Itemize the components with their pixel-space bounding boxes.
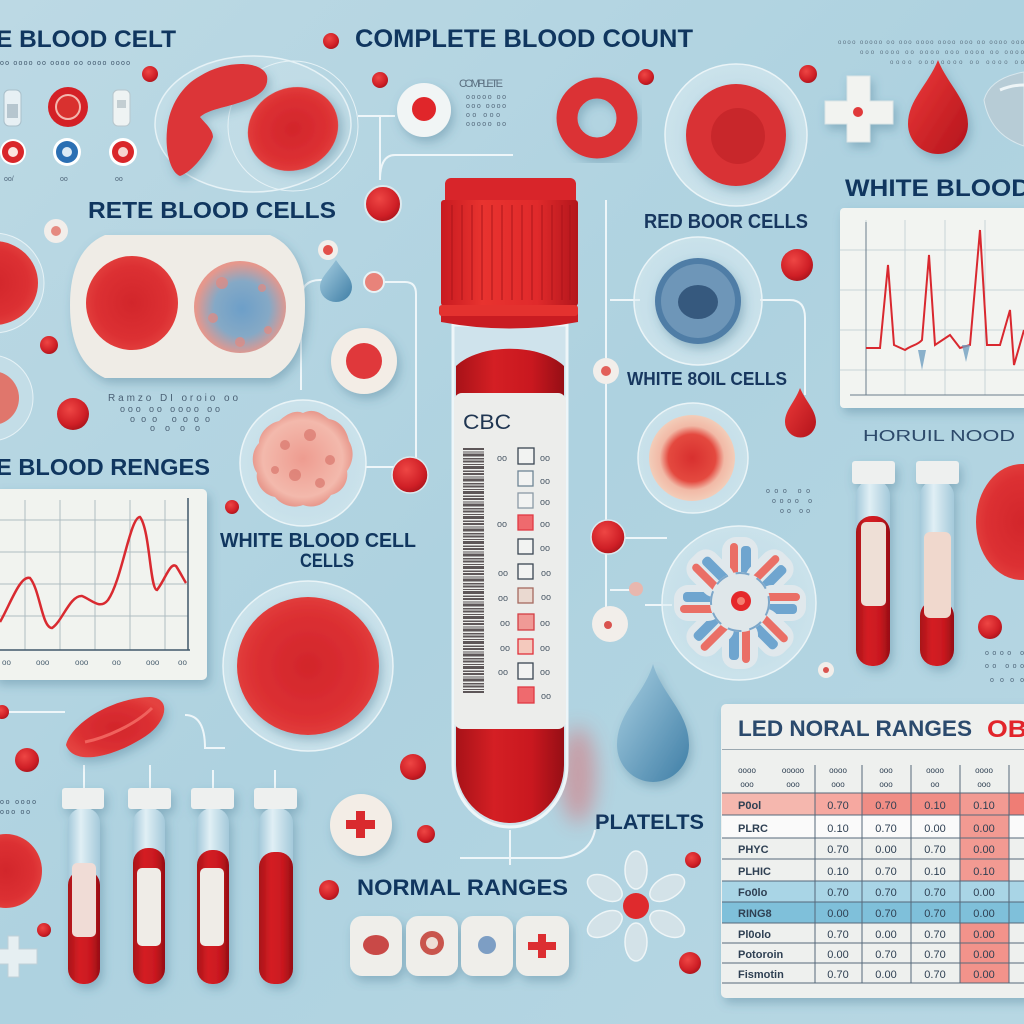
tube body (453, 325, 567, 827)
heading: platelts: PLATELTS (595, 811, 704, 834)
small text: top right note (838, 40, 1024, 66)
table text: ooo (740, 780, 754, 789)
chart: right ecg chart (840, 208, 1024, 408)
table title: LED NORAL RANGES (738, 716, 972, 741)
node: white button top (397, 83, 451, 137)
small text: complete note: ooooo oo (466, 94, 506, 101)
icon: red ring cell (567, 88, 627, 148)
label values: oo (540, 643, 550, 653)
table text: 0.70 (924, 929, 946, 941)
table text: ooo (879, 780, 893, 789)
icon: speckled cell (194, 261, 286, 353)
cell group: top left cells (155, 56, 358, 192)
small text: under cell card: Ramzo DI oroio oo (108, 393, 238, 404)
table text: 0.00 (973, 949, 995, 961)
chart: left line chart (0, 489, 207, 680)
label values: oo (540, 519, 550, 529)
table text: 0.00 (973, 908, 995, 920)
cell: right edge red cell (976, 464, 1024, 580)
table text: 0.00 (973, 887, 995, 899)
heading: cells: CELLS (300, 551, 354, 572)
heading: normal ranges: NORMAL RANGES (357, 875, 568, 900)
icon row: small icons top left (0, 87, 137, 183)
icon: biconcave cell (66, 697, 164, 757)
label values: oo (498, 667, 508, 677)
table text: ooooo (782, 766, 805, 775)
cell: platelet flower (662, 526, 816, 680)
icon row: small icons top left: oo (115, 176, 123, 183)
icon: hanging red drop (785, 388, 816, 437)
small text: right notes: oooo o (772, 498, 812, 505)
label values: oo (541, 592, 551, 602)
barcode (463, 448, 484, 693)
small text: right notes (766, 488, 1024, 684)
heading: white soil cells: WHITE 8OIL CELLS (627, 369, 787, 389)
label (454, 393, 566, 729)
heading: red boor cells: RED BOOR CELLS (644, 211, 808, 233)
icon row: normal range tiles (350, 916, 569, 976)
label values: oo (500, 643, 510, 653)
cell: left red bottom (0, 834, 42, 908)
label values: oo (540, 667, 550, 677)
label values: oo (540, 453, 550, 463)
table text: 0.00 (973, 823, 995, 835)
table text: PHYC (738, 844, 769, 856)
table text: 0.10 (973, 800, 995, 812)
cell: large red cell (223, 581, 393, 751)
tubes: right pair (852, 461, 959, 666)
heading: blood cell top left: E BLOOD CELT (0, 26, 176, 53)
table text: Fo0lo (738, 887, 768, 899)
icon: cross center (853, 107, 863, 117)
icon: blue water drop (617, 664, 689, 782)
small text: complete note (459, 78, 506, 128)
table text: 0.00 (875, 929, 897, 941)
table text: 0.10 (827, 823, 849, 835)
node: red ball (365, 186, 401, 222)
table text: PLRC (738, 823, 768, 835)
small text: left notes (0, 60, 130, 816)
cell: white blood cell (240, 400, 366, 526)
small text: left notes: oo oooo (0, 799, 36, 806)
chart: left line chart: oo (112, 658, 121, 667)
node: small discs (592, 358, 834, 678)
table text: ooo (831, 780, 845, 789)
table text: oooo (738, 766, 756, 775)
small text: top right note: oooo ooo oooo oo oooo oo (890, 60, 1024, 66)
icon: pink node (364, 272, 384, 292)
main test tube (439, 178, 596, 827)
icon row: small icons top left: oo/ (4, 176, 14, 183)
heading: complete blood count: COMPLETE BLOOD COUNT (355, 25, 693, 53)
table text: 0.00 (973, 844, 995, 856)
label values: oo (540, 618, 550, 628)
cell: left edge red cell (0, 233, 44, 333)
table row shading (722, 793, 1024, 983)
connector lines (0, 116, 805, 865)
small text: left notes: ooo oo (0, 809, 30, 816)
small text: complete note: ooo oooo (466, 103, 506, 110)
icon: white disc with cross (330, 794, 392, 856)
icons: small nodes left (44, 219, 338, 260)
chart: left line chart: ooo (36, 658, 50, 667)
table text: 0.10 (924, 866, 946, 878)
table text: 0.70 (827, 844, 849, 856)
table text: RING8 (738, 908, 772, 920)
table text: 0.00 (827, 949, 849, 961)
icon: red drop (908, 60, 968, 154)
table text: ooo (786, 780, 800, 789)
icon: glass vial corner (984, 72, 1024, 146)
table text: 0.70 (924, 908, 946, 920)
small text: right notes: oooo (990, 677, 1024, 684)
table text: 0.00 (973, 969, 995, 981)
label values: oo (540, 497, 550, 507)
table text: P0ol (738, 800, 761, 812)
table text: 0.70 (924, 887, 946, 899)
table text: 0.10 (924, 800, 946, 812)
chart: left line chart: ooo (146, 658, 160, 667)
table text (738, 766, 995, 981)
table text: 0.70 (924, 844, 946, 856)
chart: left line chart: oo (2, 658, 11, 667)
table text: oooo (829, 766, 847, 775)
icon: blue drop (320, 260, 352, 302)
chart: left line chart: ooo (75, 658, 89, 667)
table text: 0.70 (827, 929, 849, 941)
small text: right notes: oooo o (985, 650, 1024, 657)
table text: 0.10 (827, 866, 849, 878)
small text: top right note: oooo ooooo oo ooo oooo oooo ooo oo oooo ooo (838, 40, 1024, 46)
label values: oo (541, 691, 551, 701)
label values: oo (497, 453, 507, 463)
card: red cell comparison (70, 235, 305, 378)
chart: left line chart: oo (178, 658, 187, 667)
table text: 0.70 (827, 800, 849, 812)
cell: flower white cell (638, 403, 748, 513)
small text: left notes: oo oooo oo oooo oo oooo oooo (0, 60, 130, 67)
label values: oo (500, 618, 510, 628)
table text: Pl0olo (738, 929, 771, 941)
small text: under cell card: ooo oooo (130, 414, 210, 424)
heading: horuil nood: HORUIL NOOD (863, 428, 1015, 445)
tube group: bottom left tubes (62, 788, 297, 984)
table text: 0.70 (875, 887, 897, 899)
cell: textured red cell (665, 64, 807, 206)
table text: PLHIC (738, 866, 771, 878)
table text: 0.70 (875, 908, 897, 920)
table text: 0.70 (875, 866, 897, 878)
label values: oo (498, 593, 508, 603)
cell: left edge speckled (0, 355, 33, 441)
table text: 0.00 (875, 844, 897, 856)
blood (456, 349, 564, 823)
table text: 0.70 (827, 887, 849, 899)
table text: 0.00 (827, 908, 849, 920)
table text: oooo (926, 766, 944, 775)
table text: ooo (977, 780, 991, 789)
icon: cross left (0, 936, 37, 977)
small text: right notes: oo ooo (985, 663, 1024, 670)
small text: complete note: COMPLETE (459, 78, 503, 90)
small text: top right note: ooo oooo oo oooo ooo oooo oo oooo (860, 50, 1024, 56)
icon: red cell (234, 72, 352, 186)
small text: under cell card: ooo oo oooo oo (120, 404, 220, 414)
table text: 0.70 (875, 800, 897, 812)
heading: blood ranges: E BLOOD RENGES (0, 454, 210, 480)
small text: under cell card: oooo (150, 423, 200, 433)
checkboxes (518, 448, 534, 703)
label: CBC (463, 411, 511, 434)
label values: oo (498, 568, 508, 578)
icon row: small icons top left: oo (60, 176, 68, 183)
heading: white blood cell cells: WHITE BLOOD CELL (220, 530, 416, 552)
cap (439, 178, 578, 328)
icon: white disc with red (331, 328, 397, 394)
node: red ball right of tube (591, 520, 625, 554)
node: red ball (392, 457, 428, 493)
table text: 0.70 (875, 823, 897, 835)
table text: ooo (879, 766, 893, 775)
cell: blue ring cell (634, 237, 762, 365)
heading: red blood cells left: RETE BLOOD CELLS (88, 197, 336, 223)
label values (497, 453, 551, 701)
table text: Fismotin (738, 969, 784, 981)
label values: oo (540, 543, 550, 553)
table text: 0.70 (924, 949, 946, 961)
small text: complete note: ooooo oo (466, 121, 506, 128)
table flag: OB (987, 716, 1024, 743)
table text: 0.10 (973, 866, 995, 878)
small text: complete note: oo ooo (466, 112, 500, 119)
table text: 0.70 (875, 949, 897, 961)
table text: oooo (975, 766, 993, 775)
label values: oo (497, 519, 507, 529)
table: normal ranges (721, 704, 1024, 998)
icon: cross (825, 76, 893, 142)
label values: oo (541, 568, 551, 578)
small text: under cell card (108, 393, 238, 433)
heading: white blood right: WHITE BLOOD (845, 175, 1024, 202)
table text: 0.00 (973, 929, 995, 941)
table text: 0.00 (924, 823, 946, 835)
label values: oo (540, 476, 550, 486)
table text: 0.00 (875, 969, 897, 981)
table text: Potoroin (738, 949, 783, 961)
small text: right notes: oo oo (780, 508, 810, 515)
table text: 0.70 (924, 969, 946, 981)
small text: right notes: ooo oo (766, 488, 810, 495)
icon: red cell (86, 256, 178, 350)
icon: platelet flower small (583, 851, 689, 961)
table text: 0.70 (827, 969, 849, 981)
icon: folded red cell (167, 64, 267, 176)
table text: oo (931, 780, 940, 789)
